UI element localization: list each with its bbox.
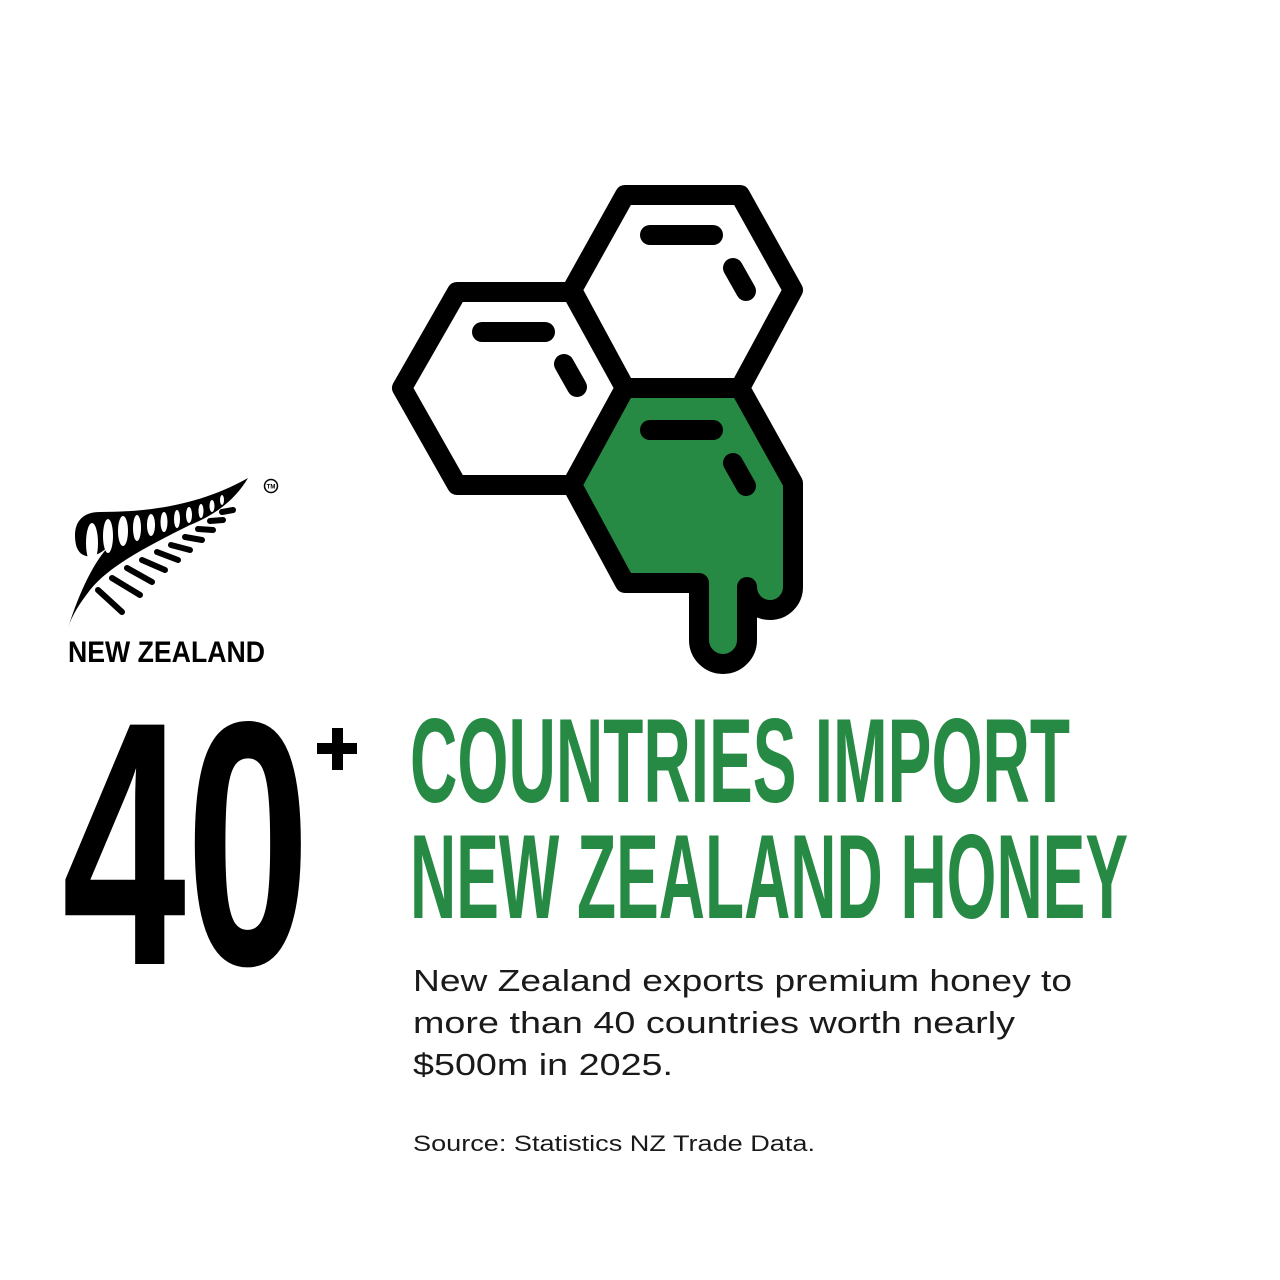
fern lower leaflets	[98, 510, 233, 612]
top hexagon	[572, 195, 793, 388]
logo: New Zealand fern mark	[68, 478, 278, 669]
logo wordmark: NEW ZEALAND	[68, 636, 265, 669]
body text: $500m in 2025.	[413, 1047, 673, 1082]
plus sign	[317, 728, 357, 770]
fern upper leaflet holes	[86, 495, 224, 563]
fern upper band	[68, 478, 248, 628]
trademark	[264, 480, 278, 492]
big number 40+: 40	[62, 649, 310, 1038]
headline	[410, 694, 1128, 944]
logo: New Zealand fern mark: TM	[267, 484, 275, 490]
icon: honeycomb with dripping green honey	[402, 195, 793, 664]
body text	[413, 963, 1072, 1082]
highlight strokes	[482, 235, 746, 486]
body text: New Zealand exports premium honey to	[413, 963, 1072, 998]
source note: Source: Statistics NZ Trade Data.	[413, 1131, 815, 1156]
body text: more than 40 countries worth nearly	[413, 1005, 1016, 1040]
green honey hexagon with drip	[572, 388, 793, 664]
left hexagon	[402, 292, 625, 485]
